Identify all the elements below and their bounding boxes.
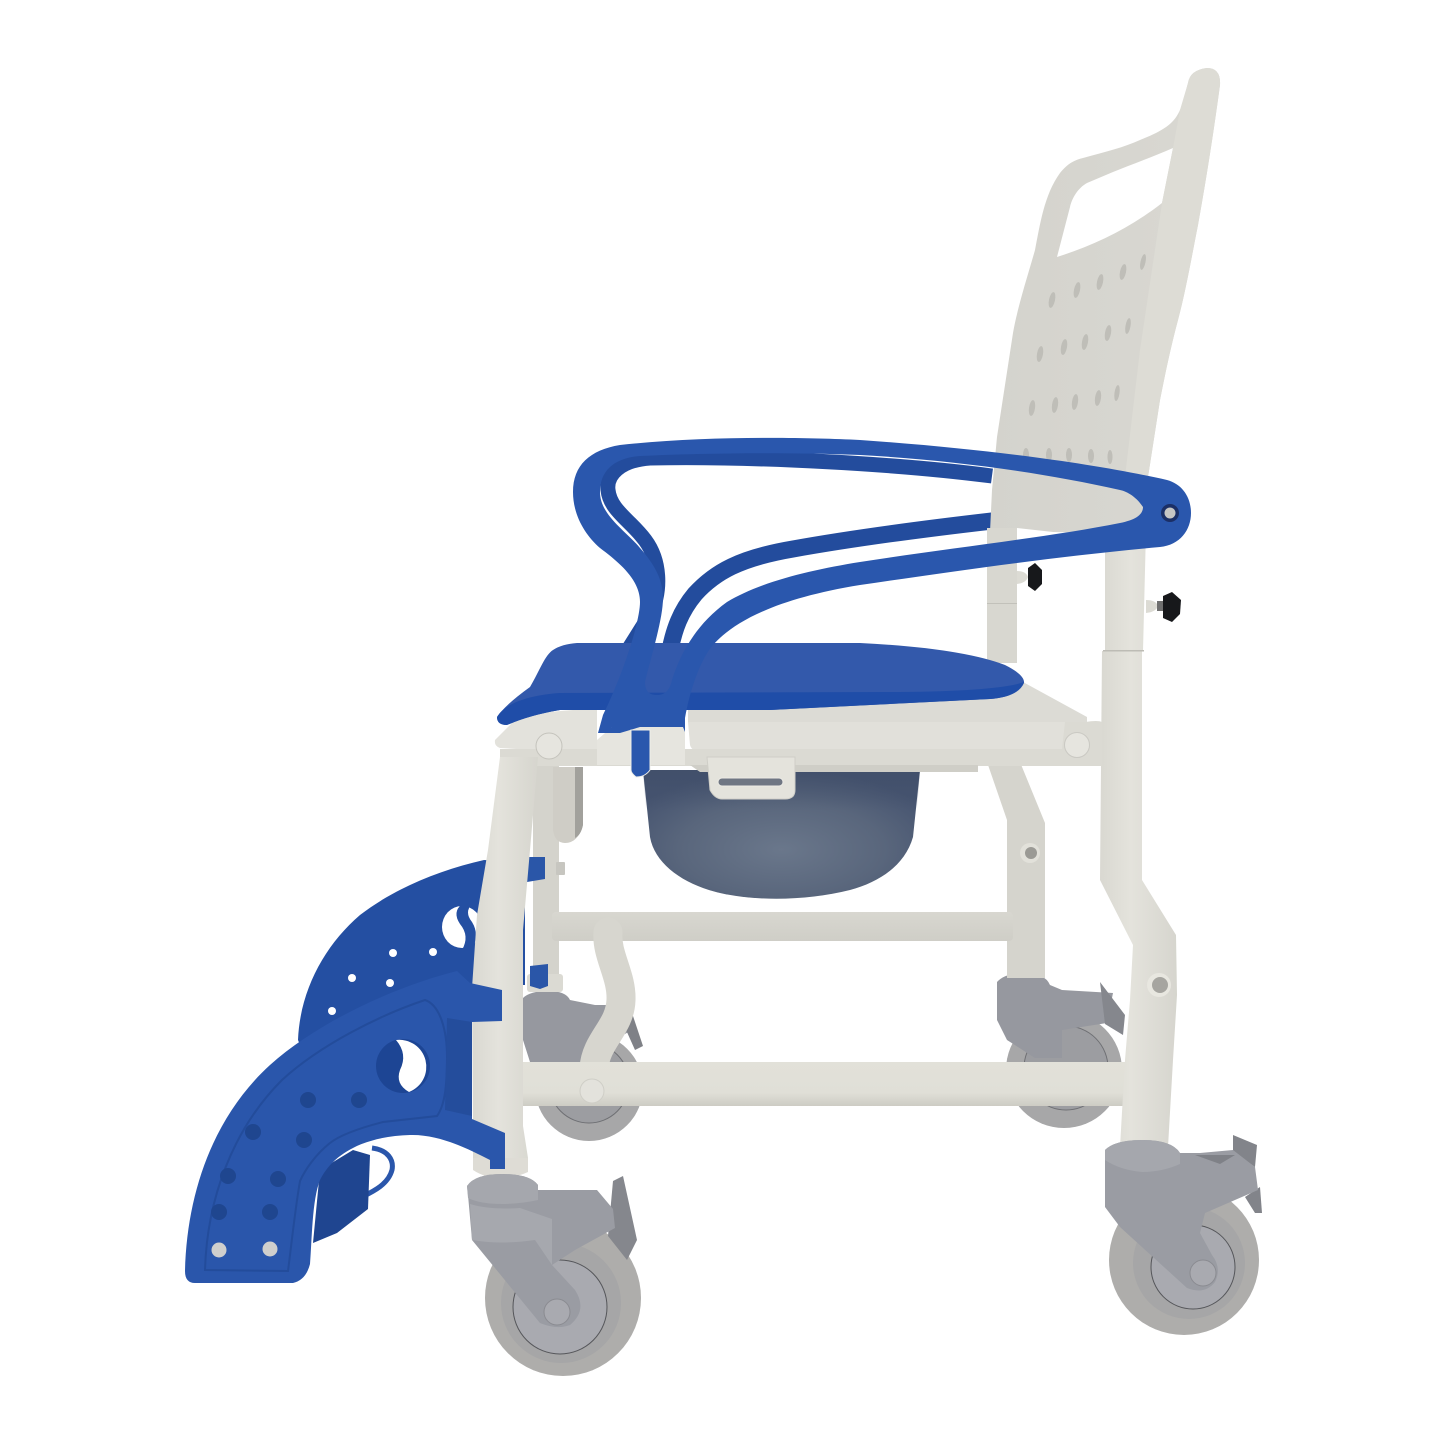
lower cross bar (515, 1062, 1132, 1106)
bucket clip (707, 757, 795, 799)
rear far caster left (523, 991, 643, 1064)
hanging bracket (553, 767, 583, 843)
far front leg (533, 765, 559, 987)
front frame leg (472, 757, 538, 1158)
front leg collar (473, 1158, 528, 1178)
post sleeve line (1103, 650, 1144, 652)
rear caster fork and brake (1105, 1135, 1262, 1290)
far rear leg hole (1020, 843, 1040, 863)
adjustment knob left (1017, 563, 1042, 591)
seat pad front rim (497, 682, 1024, 725)
rear far wheel right (1006, 1012, 1122, 1128)
rear footrest (298, 857, 548, 1045)
armrest clip (597, 727, 685, 777)
rear far wheel left (535, 1033, 643, 1141)
leg pin (556, 862, 565, 875)
armrest pivot bolt (1161, 504, 1179, 522)
near footrest (185, 971, 505, 1283)
backrest rail highlight (1125, 68, 1220, 477)
armrest main loop (573, 438, 1191, 733)
near back post and rear leg (1100, 530, 1177, 1147)
rear far caster right (997, 973, 1125, 1058)
far leg collar (527, 974, 563, 992)
backrest ventilation holes (1023, 254, 1147, 464)
front caster fork and brake (467, 1174, 637, 1327)
far rear leg (987, 762, 1045, 978)
commode bucket (643, 770, 920, 899)
rear leg hole (1147, 973, 1171, 997)
blue seat pad (497, 643, 1024, 725)
far back post (987, 528, 1017, 663)
rear caster wheel (1109, 1185, 1259, 1335)
bucket hanger curve (594, 932, 621, 1068)
front caster wheel (485, 1220, 641, 1376)
adjustment knob right (1146, 592, 1181, 622)
far armrest (608, 458, 992, 650)
upper cross bar (552, 912, 1013, 941)
far post sleeve line (987, 603, 1017, 604)
seat frame (495, 682, 1102, 772)
backrest with handle (990, 68, 1220, 534)
footplate and strap behind near footrest (313, 1148, 392, 1243)
